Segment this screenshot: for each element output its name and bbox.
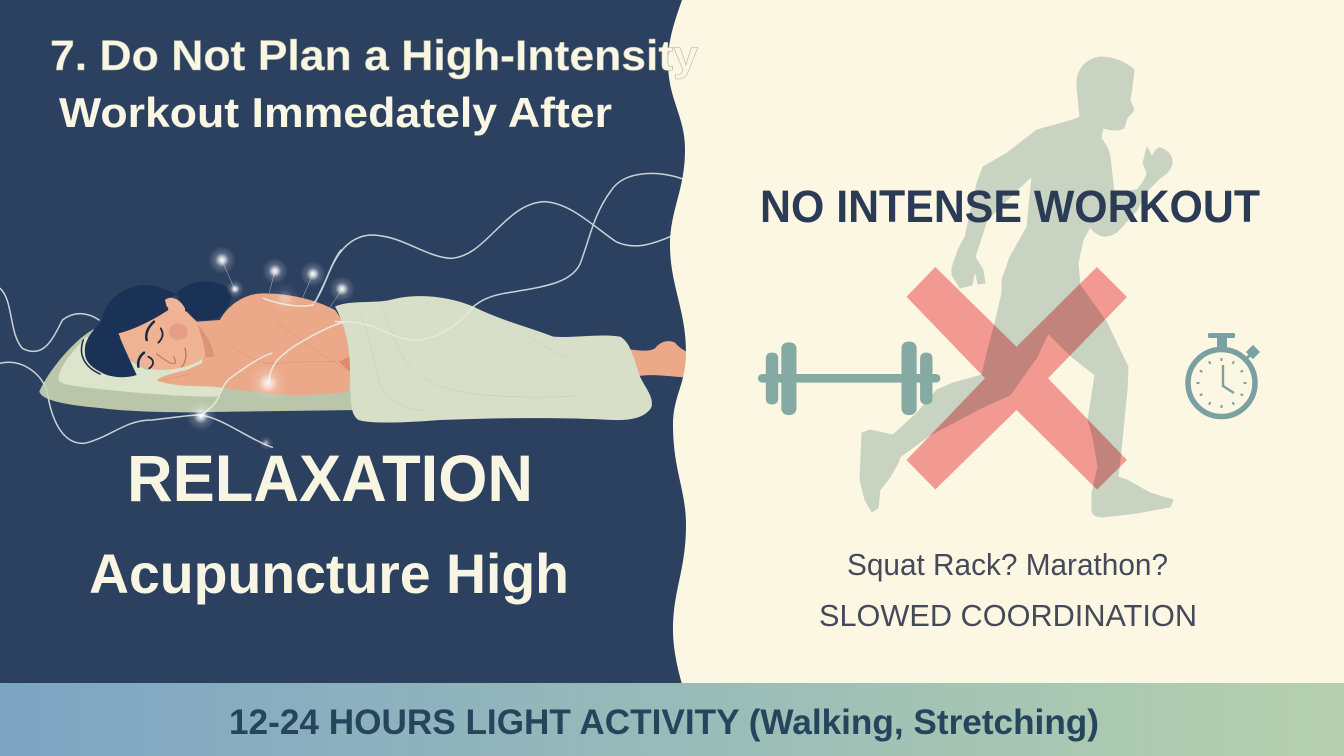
blanket	[335, 296, 652, 423]
body	[157, 293, 352, 395]
cheek	[169, 323, 188, 340]
mat	[39, 329, 360, 412]
back highlight	[263, 298, 313, 306]
energy line across the blanket	[336, 307, 473, 340]
bottom banner	[0, 683, 1344, 756]
blanket folds	[357, 307, 577, 411]
closed eyes and smile	[81, 322, 186, 374]
energy lines over the figure	[201, 250, 347, 416]
pillow	[58, 337, 243, 397]
foot	[630, 341, 688, 377]
foot and blanket	[335, 296, 688, 423]
question text: Squat Rack? Marathon?	[847, 547, 1168, 582]
illustration: woman resting during acupuncture	[39, 260, 360, 412]
heading: no intense workout: NO INTENSE WORKOUT	[760, 181, 1260, 232]
title line two: Workout Immedately After	[59, 89, 612, 136]
caption: slowed coordination: SLOWED COORDINATION	[819, 598, 1197, 633]
runner silhouette	[860, 57, 1173, 517]
hair	[85, 285, 177, 377]
arm shadow	[338, 356, 351, 372]
hair bun	[177, 282, 231, 321]
acupuncture needles	[222, 260, 342, 307]
face	[118, 307, 205, 370]
subheading: acupuncture high: Acupuncture High	[89, 542, 569, 605]
energy lines behind the figure	[0, 173, 685, 351]
body creases	[158, 322, 347, 381]
title	[50, 32, 698, 136]
banner text: 12-24 HOURS LIGHT ACTIVITY (Walking, Stretching)	[229, 703, 1099, 742]
energy lines below the mat	[0, 362, 272, 447]
barbell icon	[758, 342, 940, 415]
ear	[165, 298, 185, 315]
panel: relaxation side	[0, 0, 700, 690]
heading: relaxation: RELAXATION	[127, 441, 533, 515]
neck shadow	[198, 325, 214, 357]
cream wavy panel	[668, 0, 1344, 684]
stopwatch icon	[1188, 333, 1260, 416]
title line one: 7. Do Not Plan a High-Intensity	[50, 32, 698, 80]
panel: no intense workout side	[668, 0, 1344, 684]
glowing needle tips	[186, 246, 355, 450]
red cross mark	[906, 267, 1127, 490]
